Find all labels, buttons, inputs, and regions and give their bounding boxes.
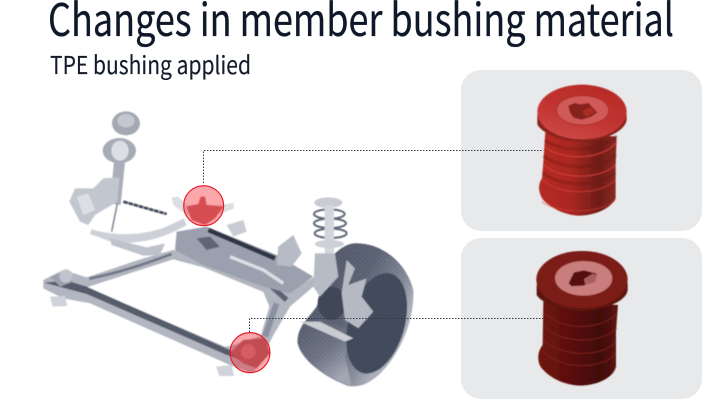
icon: dark red bushing <box>536 251 628 386</box>
icon: red TPE bushing <box>537 85 627 216</box>
subtitle: TPE bushing applied <box>50 47 251 82</box>
left strut and spring <box>69 111 187 256</box>
leader line: upper <box>204 150 543 183</box>
right strut and spring <box>300 197 373 342</box>
lower bushing highlight <box>230 333 270 373</box>
steering rack and centre <box>172 197 313 293</box>
upper bushing highlight <box>184 186 224 226</box>
illustration: front suspension <box>43 111 418 386</box>
leader line: lower <box>250 318 543 332</box>
panel: upper bushing <box>461 70 702 231</box>
panel: lower bushing <box>461 238 702 399</box>
wheel <box>298 243 418 386</box>
front subframe <box>43 250 315 376</box>
